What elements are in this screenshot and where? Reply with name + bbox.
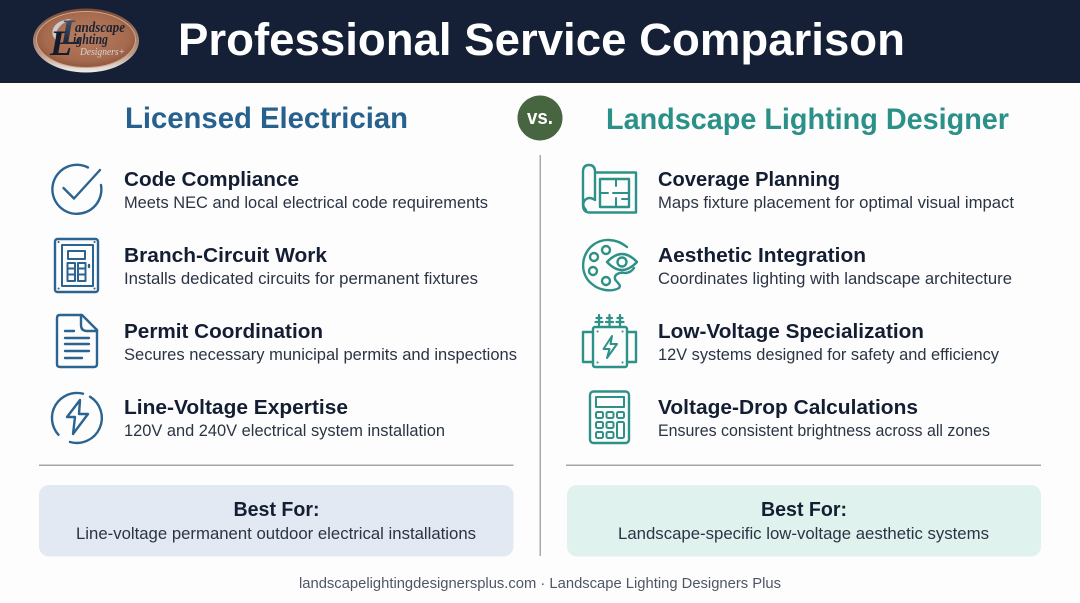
item: coverage planning: [583, 165, 1014, 212]
icon: document: [57, 315, 97, 367]
icon: check circle: [52, 165, 101, 214]
icon: blueprint: [583, 165, 636, 212]
item: voltage-drop calculations: Voltage-Drop Calculations: [658, 396, 918, 419]
center divider: [540, 155, 541, 556]
item: voltage-drop calculations: [590, 392, 990, 443]
logo: andscape: [75, 20, 125, 36]
panel: landscape lighting designer: [566, 165, 1041, 556]
item: aesthetic integration: [583, 240, 1012, 290]
item: code compliance: [52, 165, 488, 214]
logo: Designers+: [79, 47, 125, 58]
item: line-voltage expertise: [52, 393, 445, 443]
item: line-voltage expertise: Line-Voltage Expertise: [124, 396, 348, 419]
item: low-voltage specialization: [583, 315, 1000, 367]
panel: licensed electrician: [39, 165, 517, 556]
item: low-voltage specialization: Low-Voltage Specialization: [658, 320, 924, 343]
best for box: electrician: Best For:: [234, 498, 320, 521]
logo: [33, 8, 139, 72]
item: permit coordination: Permit Coordination: [124, 320, 323, 343]
heading: landscape lighting designer: Landscape Lighting Designer: [606, 103, 1010, 136]
best for box: electrician: Line-voltage permanent outdoor electrical installations: [76, 525, 476, 543]
best for box: designer: Best For:: [761, 498, 847, 521]
item: coverage planning: Coverage Planning: [658, 168, 840, 191]
item: line-voltage expertise: 120V and 240V electrical system installation: [124, 422, 445, 440]
item: coverage planning: Maps fixture placement for optimal visual impact: [658, 194, 1014, 212]
item: code compliance: Meets NEC and local electrical code requirements: [124, 194, 488, 212]
footer: landscapelightingdesignersplus.com · Landscape Lighting Designers Plus: [299, 575, 781, 592]
header bar: [0, 0, 1080, 83]
icon: palette with eye: [583, 240, 637, 290]
item: branch-circuit work: Branch-Circuit Work: [124, 244, 328, 267]
best for box: designer: Landscape-specific low-voltage aesthetic systems: [618, 525, 989, 543]
heading: licensed electrician: Licensed Electrician: [125, 102, 408, 135]
item: low-voltage specialization: 12V systems designed for safety and efficiency: [658, 346, 1000, 364]
logo: ighting: [73, 32, 108, 48]
icon: lightning circle: [52, 393, 102, 443]
vs badge: vs.: [527, 107, 553, 129]
item: permit coordination: Secures necessary municipal permits and inspections: [124, 346, 517, 364]
icon: electrical panel: [55, 239, 98, 292]
item: code compliance: Code Compliance: [124, 168, 299, 191]
icon: calculator: [590, 392, 629, 443]
item: branch-circuit work: [55, 239, 478, 292]
item: voltage-drop calculations: Ensures consistent brightness across all zones: [658, 422, 990, 440]
logo: L: [49, 23, 72, 63]
item: branch-circuit work: Installs dedicated circuits for permanent fixtures: [124, 270, 478, 288]
item: aesthetic integration: Aesthetic Integration: [658, 244, 866, 267]
item: permit coordination: [57, 315, 517, 367]
best for box: electrician: [39, 485, 514, 556]
best for box: designer: [567, 485, 1041, 556]
item: aesthetic integration: Coordinates lighting with landscape architecture: [658, 270, 1012, 288]
title: Professional Service Comparison: [178, 14, 905, 65]
icon: transformer: [583, 315, 636, 367]
logo: L: [59, 12, 82, 52]
vs badge: [518, 96, 562, 140]
